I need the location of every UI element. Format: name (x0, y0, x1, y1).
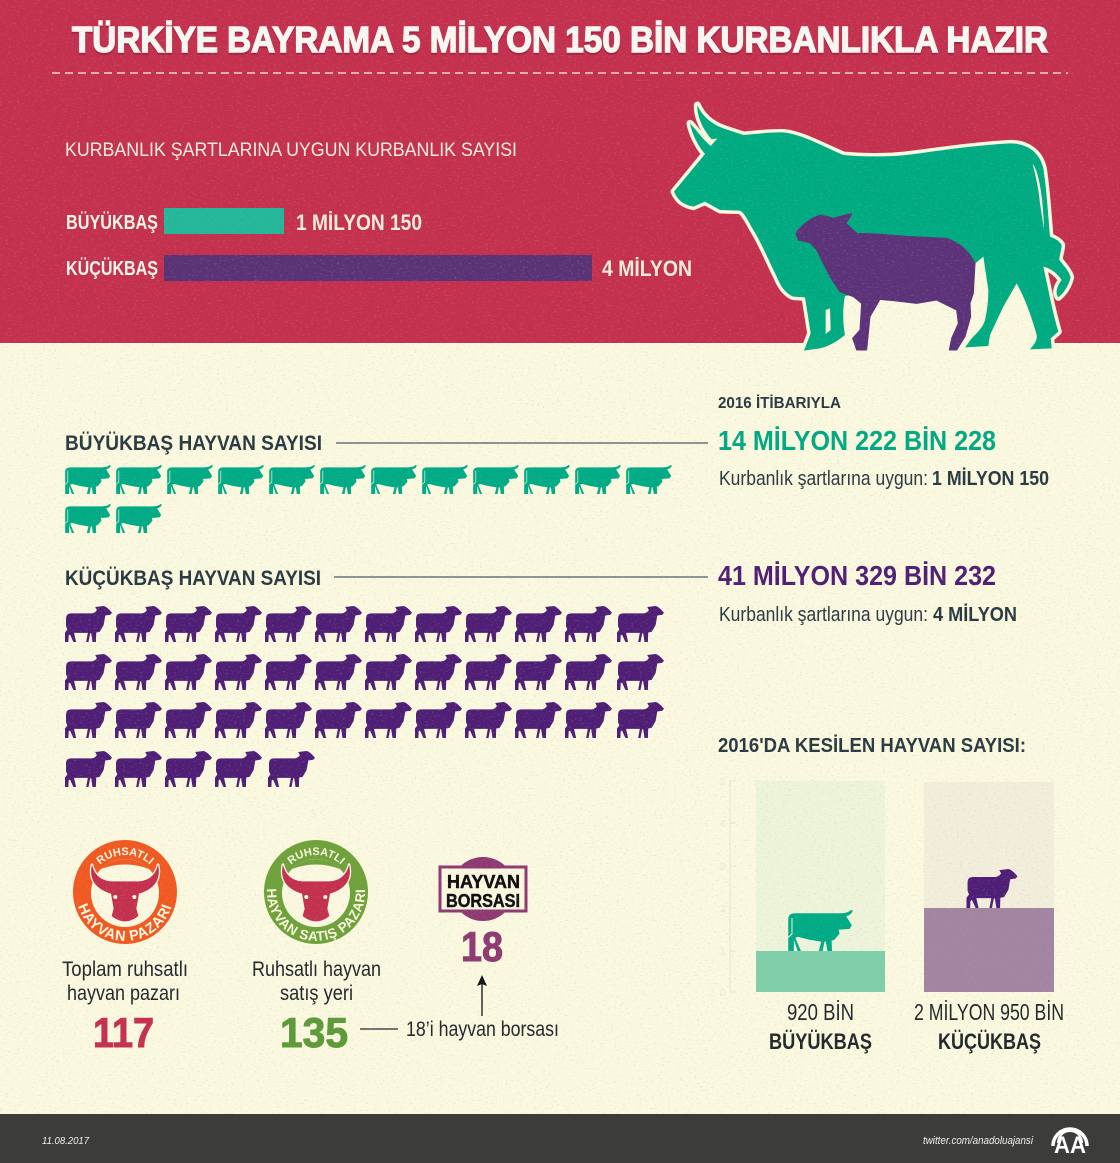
label: küçükbaş: KÜÇÜKBAŞ (66, 257, 158, 280)
panel: eligible animal bar chart (65, 140, 692, 281)
badge: ruhsatlı hayvan satış pazarı: RUHSATLI (287, 847, 346, 864)
badge: ruhsatlı hayvan pazarı: RUHSATLI (96, 847, 154, 864)
label: büyükbaş: BÜYÜKBAŞ (769, 1029, 872, 1054)
note: 18 borsa: 18’i hayvan borsası (406, 1018, 559, 1041)
stat: satış yeri: 135 (280, 1009, 348, 1056)
bar: büyükbaş (756, 951, 885, 992)
illustration: bull and sheep (674, 105, 1071, 352)
year note: 2016 İTİBARIYLA (718, 394, 841, 412)
eligible note: Kurbanlık şartlarına uygun: (719, 604, 928, 626)
panel: büyükbaş count (65, 394, 1049, 490)
bar: büyükbaş (164, 208, 284, 234)
stat: hayvan pazarı: Toplam ruhsatlı (62, 958, 188, 981)
heading: BÜYÜKBAŞ HAYVAN SAYISI (65, 432, 322, 455)
badge: ruhsatlı hayvan satış pazarı: HAYVAN SATIŞ PAZARI (266, 889, 366, 942)
stat: satış yeri: Ruhsatlı hayvan (252, 958, 381, 981)
bar track: küçükbaş (924, 782, 1054, 992)
chart heading: 2016'DA KESİLEN HAYVAN SAYISI: (718, 734, 1026, 757)
axis labels: 3 (720, 862, 726, 873)
icon: sheep (966, 869, 1018, 908)
badge: hayvan borsası (440, 857, 526, 921)
title: TÜRKİYE BAYRAMA 5 MİLYON 150 BİN KURBANLIKLA HAZIR (72, 19, 1048, 60)
faint axis (730, 781, 736, 992)
date: 11.08.2017 (42, 1136, 89, 1147)
value: büyükbaş: 920 BİN (787, 999, 854, 1025)
stat: hayvan pazarı: 117 (93, 1009, 154, 1056)
badge: hayvan borsası: BORSASI (446, 891, 520, 911)
axis labels: 0 (720, 988, 726, 999)
total number: 14 MİLYON 222 BİN 228 (718, 425, 996, 456)
stat: satış yeri (252, 958, 381, 1056)
panel: slaughter chart (718, 734, 1064, 1054)
stat: hayvan pazarı: hayvan pazarı (67, 982, 180, 1005)
panel: red header background (0, 0, 1120, 343)
pictogram: cows (65, 465, 672, 533)
icon: cow (788, 910, 853, 951)
twitter handle: twitter.com/anadoluajansi (923, 1135, 1033, 1147)
axis labels (720, 777, 726, 999)
stat: borsa: 18 (461, 923, 503, 970)
arrow: to borsa (477, 975, 487, 1016)
stat: hayvan pazarı (62, 958, 188, 1056)
bar: küçükbaş (924, 908, 1054, 992)
axis labels: 4 (720, 819, 726, 830)
bar track: büyükbaş (756, 781, 885, 992)
axis labels: 2 (720, 904, 726, 915)
eligible value: 1 MİLYON 150 (932, 467, 1049, 490)
label: küçükbaş: KÜÇÜKBAŞ (938, 1029, 1041, 1054)
eligible note: Kurbanlık şartlarına uygun: (719, 468, 928, 490)
value: küçükbaş: 4 MİLYON (602, 256, 692, 281)
logo: AA: AA (1054, 1132, 1086, 1159)
footer bar (0, 1114, 1120, 1163)
subtitle: KURBANLIK ŞARTLARINA UYGUN KURBANLIK SAYISI (65, 140, 517, 161)
badge: hayvan borsası: HAYVAN (447, 872, 520, 892)
illustration: sheep (796, 213, 975, 350)
bar: küçükbaş (164, 255, 592, 281)
badge: ruhsatlı hayvan satış pazarı (264, 840, 368, 944)
eligible value: 4 MİLYON (933, 603, 1017, 626)
stat: satış yeri: satış yeri (280, 982, 353, 1005)
badge: ruhsatlı hayvan pazarı: HAYVAN PAZARI (78, 903, 172, 941)
panel: küçükbaş count (65, 560, 1017, 626)
axis labels: 5 (720, 777, 726, 788)
pictogram: sheep (65, 606, 664, 787)
total number: 41 MİLYON 329 BİN 232 (718, 560, 996, 591)
value: küçükbaş: 2 MİLYON 950 BİN (914, 999, 1064, 1025)
label: büyükbaş: BÜYÜKBAŞ (66, 211, 158, 234)
badge: ruhsatlı hayvan pazarı (73, 840, 177, 944)
axis labels: 1 (720, 947, 726, 958)
value: büyükbaş: 1 MİLYON 150 (296, 210, 422, 235)
heading: KÜÇÜKBAŞ HAYVAN SAYISI (65, 567, 321, 590)
